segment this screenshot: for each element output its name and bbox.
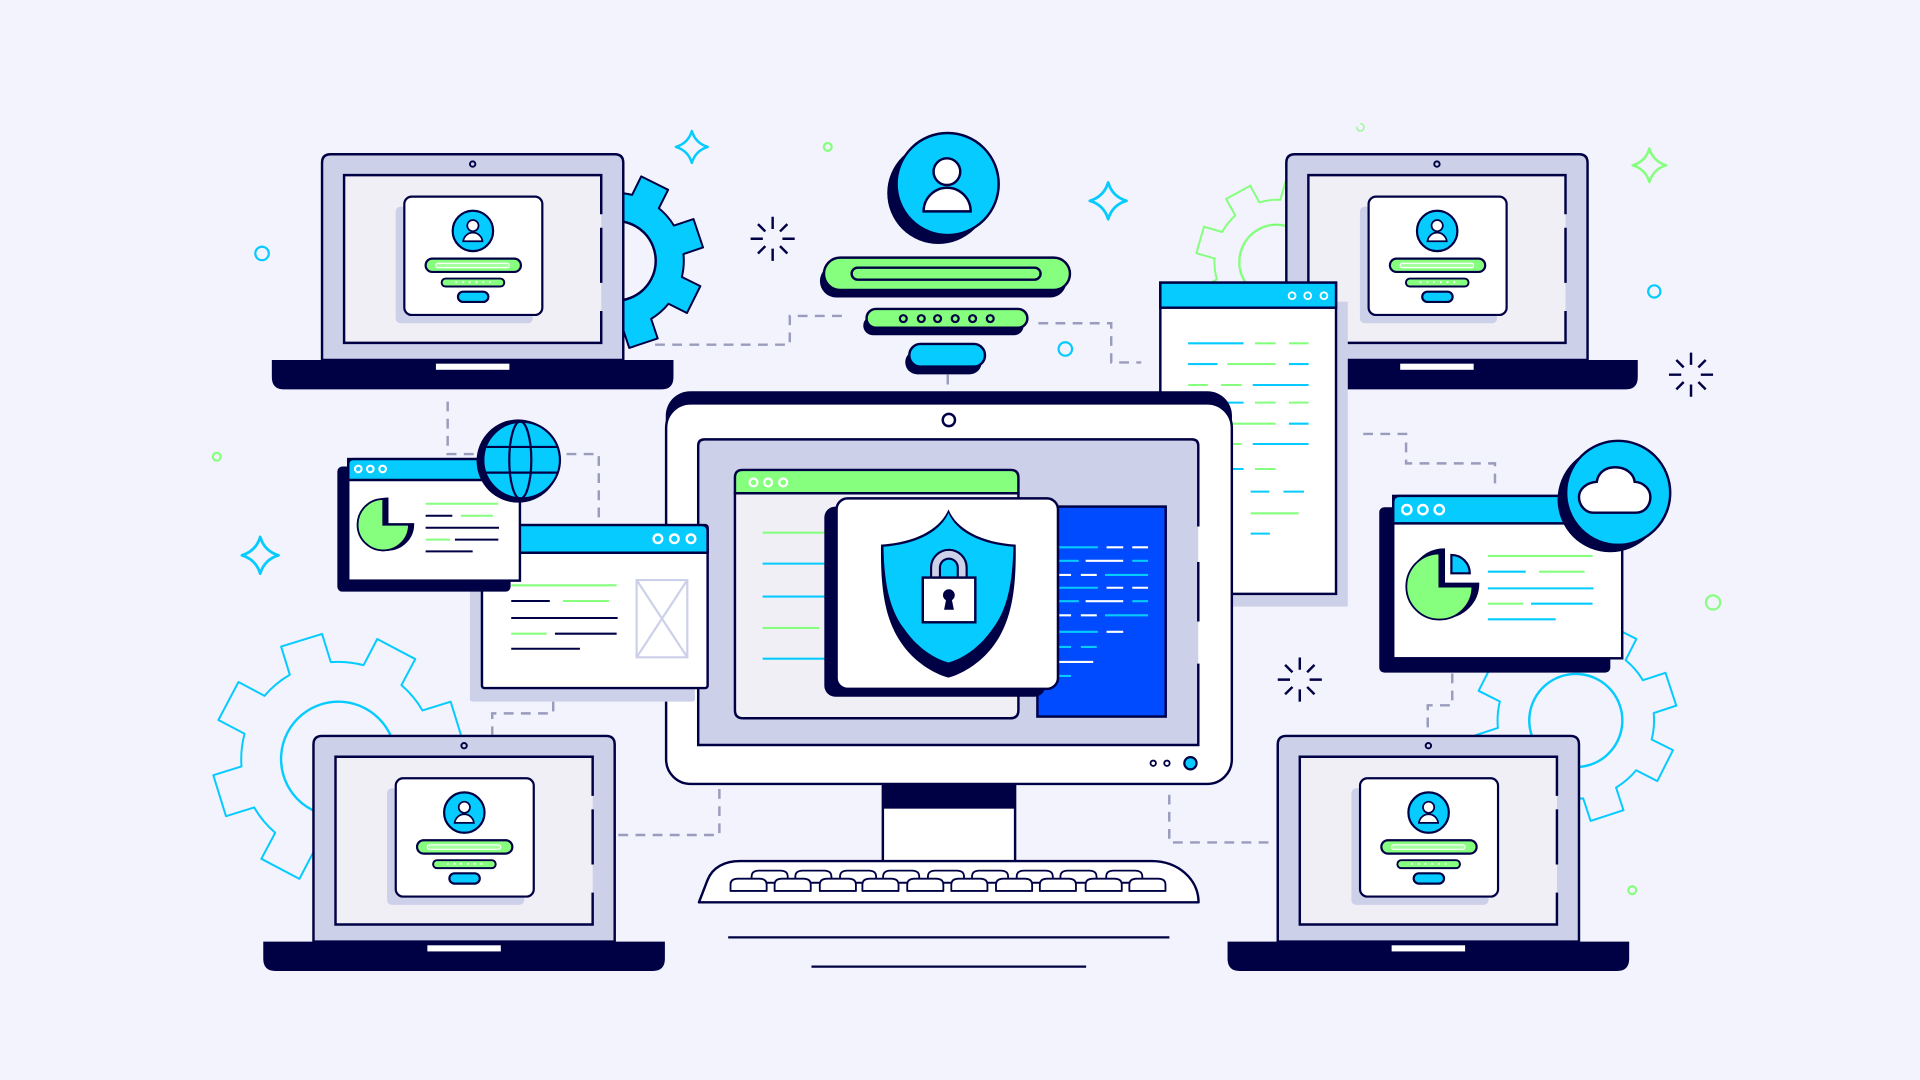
window header [348, 459, 520, 480]
login card [387, 778, 534, 905]
laptop shell [263, 736, 665, 971]
monitor stand [882, 784, 1015, 862]
window dots [1289, 292, 1327, 299]
monitor bezel [666, 403, 1232, 784]
laptop shell [1236, 154, 1638, 389]
icon: shield [881, 509, 1016, 678]
gear: cyan outline bottom-left [183, 604, 494, 914]
gear hole: blue gear [576, 221, 656, 301]
icon: padlock [923, 554, 975, 622]
monitor screen [698, 439, 1198, 745]
gear: green outline top-right [1178, 163, 1375, 361]
login card [1351, 778, 1498, 905]
monitor top shadow [666, 391, 1232, 514]
login button [905, 344, 985, 374]
panel: large pie chart window [1379, 496, 1622, 673]
pie chart [358, 498, 413, 550]
icon: cloud badge [1558, 441, 1670, 552]
window header [1393, 496, 1592, 523]
image placeholder [637, 580, 687, 657]
security card [824, 498, 1058, 697]
text lines [1488, 556, 1593, 604]
laptop: bottom-left [263, 736, 665, 971]
login card [396, 197, 542, 323]
keyboard [699, 861, 1199, 902]
laptop shell [1228, 736, 1629, 971]
window dots [355, 466, 386, 472]
text lines [426, 504, 498, 540]
panel: desktop monitor [666, 391, 1232, 862]
text lines [511, 585, 617, 634]
panel: tall code window [1160, 283, 1348, 607]
login card [1360, 197, 1507, 323]
panel: small pie chart window [337, 459, 520, 592]
code lines: cyan [1188, 343, 1309, 534]
laptop: top-left [272, 154, 673, 389]
monitor camera [943, 414, 955, 426]
dashed connector lines [448, 316, 1495, 842]
keys: back row [752, 871, 1142, 883]
desk lines [728, 937, 1169, 967]
blue code panel [1037, 507, 1166, 717]
pie chart [1406, 549, 1479, 620]
laptop: top-right [1236, 154, 1638, 389]
code lines: green [1188, 343, 1309, 513]
gear: cyan outline bottom-right [1449, 594, 1702, 847]
monitor indicator lights [1151, 757, 1197, 769]
gear: blue top-left [506, 151, 726, 371]
window dots [654, 534, 695, 543]
username field [820, 258, 1070, 298]
decorative sparkles and circles [213, 124, 1720, 894]
icon: globe [477, 419, 560, 503]
password field [863, 309, 1027, 335]
keys: front row [731, 879, 1165, 891]
green browser window [735, 470, 1018, 718]
laptop shell [272, 154, 673, 389]
panel: wireframe window [470, 525, 708, 702]
window header [482, 525, 708, 553]
icon: user avatar [887, 133, 999, 244]
panel: central login form [820, 133, 1070, 374]
window dots [1402, 505, 1444, 514]
window header [1160, 283, 1336, 308]
laptop: bottom-right [1228, 736, 1629, 971]
